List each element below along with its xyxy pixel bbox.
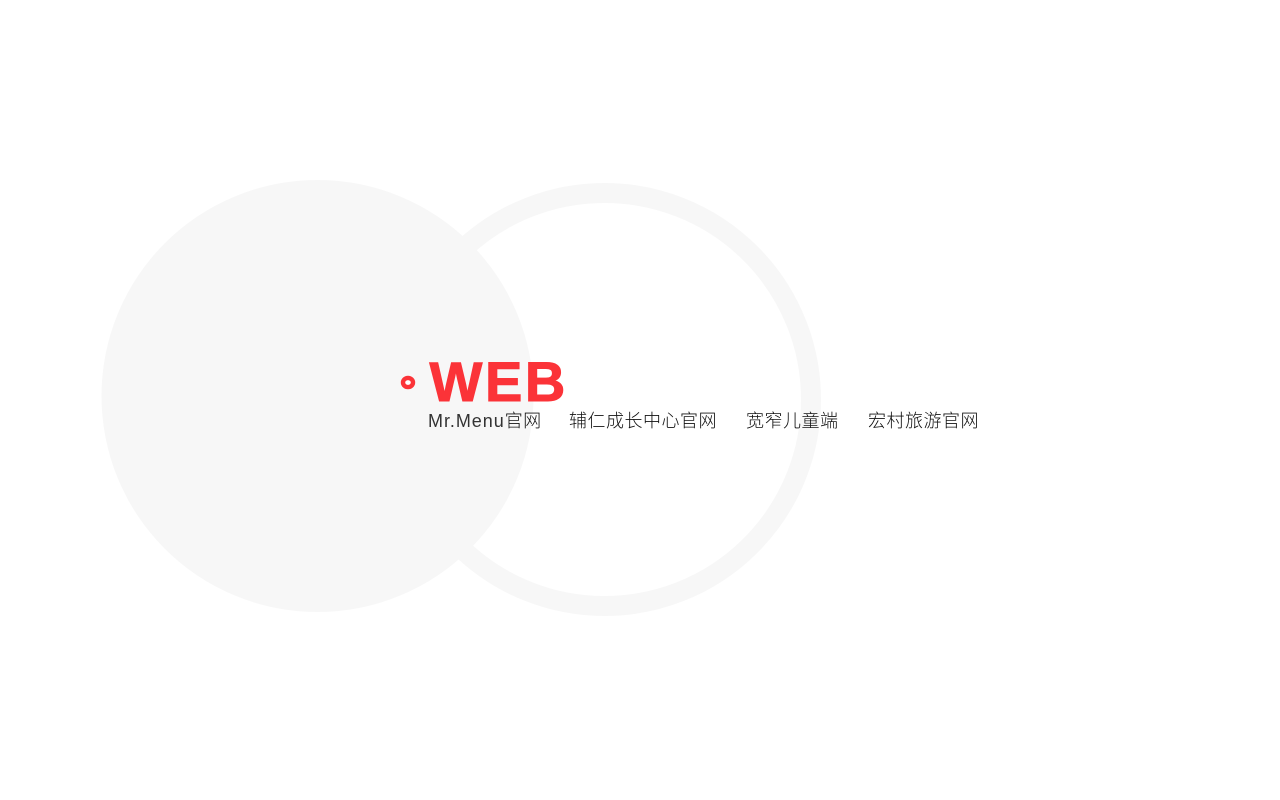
filled disc	[102, 180, 534, 612]
project list	[428, 411, 979, 431]
ring outline circle	[398, 193, 811, 606]
item: Mr.Menu官网: Mr.Menu官网	[428, 411, 542, 431]
heading: WEB: WEB	[430, 350, 568, 413]
item: 辅仁成长中心官网: 辅仁成长中心官网	[569, 411, 717, 431]
item: 宏村旅游官网: 宏村旅游官网	[868, 411, 979, 431]
icon: red ring bullet	[400, 376, 416, 390]
item: 宽窄儿童端: 宽窄儿童端	[746, 411, 838, 431]
